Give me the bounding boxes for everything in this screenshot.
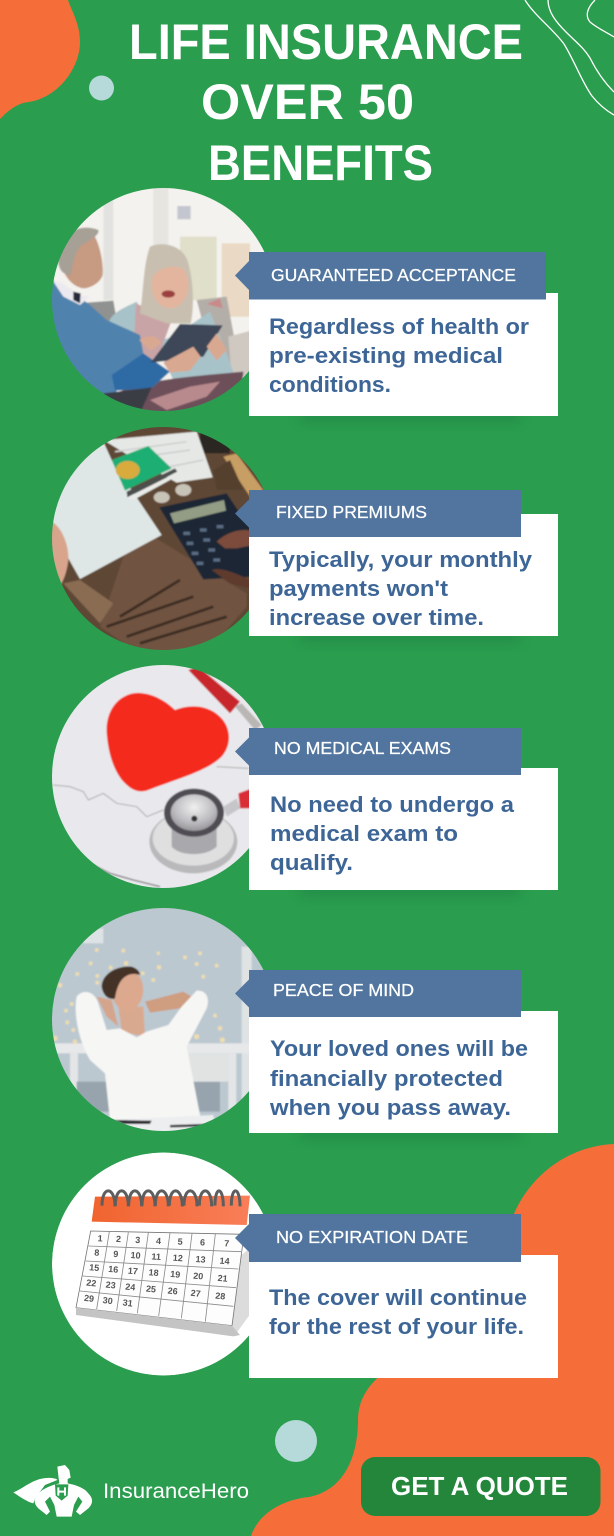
calendar dates: 10 xyxy=(130,1250,141,1261)
calendar dates: 4 xyxy=(156,1236,161,1246)
title: LIFE INSURANCE xyxy=(129,14,523,70)
calendar dates: 22 xyxy=(86,1278,97,1289)
calendar dates: 14 xyxy=(219,1256,230,1266)
title: OVER 50 xyxy=(201,74,414,130)
card: peace of mind: Your loved ones will be xyxy=(270,1036,528,1061)
card: guaranteed acceptance xyxy=(235,252,558,422)
card: no expiration date: The cover will continue xyxy=(269,1285,527,1310)
calendar dates: 24 xyxy=(125,1282,136,1293)
photo: relaxed woman at desk xyxy=(52,908,264,1131)
calendar dates: 19 xyxy=(170,1269,181,1280)
card: fixed premiums: Typically, your monthly xyxy=(269,547,533,572)
calendar dates: 8 xyxy=(94,1248,100,1258)
calendar dates: 5 xyxy=(177,1237,183,1247)
decorative orange blob top left xyxy=(0,0,80,119)
card: peace of mind: financially protected xyxy=(270,1066,503,1091)
calendar dates: 15 xyxy=(89,1262,100,1273)
card: fixed premiums: FIXED PREMIUMS xyxy=(276,502,427,522)
logo: InsuranceHero xyxy=(13,1465,249,1517)
button: get a quote xyxy=(361,1457,600,1516)
calendar dates: 25 xyxy=(145,1284,156,1295)
light blue dot bottom xyxy=(275,1420,317,1462)
icon: caped hero xyxy=(13,1465,92,1517)
card: fixed premiums xyxy=(235,490,558,642)
calendar dates: 26 xyxy=(167,1286,178,1297)
card: fixed premiums: payments won't xyxy=(269,576,449,601)
calendar base xyxy=(76,1308,240,1336)
calendar dates: 16 xyxy=(108,1264,119,1275)
card: guaranteed acceptance: pre-existing medical xyxy=(269,343,503,368)
card: fixed premiums: increase over time. xyxy=(269,605,484,630)
calendar dates: 3 xyxy=(135,1235,141,1245)
photo: couple with tablet xyxy=(52,188,264,411)
card: peace of mind: when you pass away. xyxy=(269,1095,511,1120)
card: no medical exams: qualify. xyxy=(270,850,353,875)
calendar dates: 13 xyxy=(195,1254,206,1265)
card: guaranteed acceptance: GUARANTEED ACCEPTANCE xyxy=(271,265,516,285)
decorative contour lines top right xyxy=(525,0,614,115)
calendar dates: 27 xyxy=(190,1288,201,1299)
calendar dates: 7 xyxy=(224,1238,230,1248)
calendar header xyxy=(92,1196,250,1225)
card: no expiration date: for the rest of your life. xyxy=(269,1314,524,1339)
title xyxy=(129,14,523,191)
calendar dates: 17 xyxy=(128,1266,138,1276)
calendar dates: 20 xyxy=(193,1271,204,1281)
card: no medical exams: NO MEDICAL EXAMS xyxy=(274,738,451,758)
button: get a quote: GET A QUOTE xyxy=(391,1471,568,1501)
light blue dot top xyxy=(89,76,114,100)
title: BENEFITS xyxy=(208,135,433,191)
logo: InsuranceHero: InsuranceHero xyxy=(103,1480,249,1503)
photo: red heart and stethoscope xyxy=(52,665,264,888)
card: peace of mind xyxy=(235,970,558,1139)
calendar grid xyxy=(80,1232,241,1322)
card: no medical exams: medical exam to xyxy=(270,821,458,846)
card: no medical exams xyxy=(235,728,558,896)
calendar dates: 31 xyxy=(122,1297,133,1309)
card: guaranteed acceptance: conditions. xyxy=(269,372,391,397)
photo: calculator on wooden desk xyxy=(52,427,264,650)
calendar dates: 30 xyxy=(102,1295,113,1306)
calendar stand xyxy=(232,1250,249,1332)
calendar dates: 2 xyxy=(116,1234,121,1244)
calendar sheet xyxy=(76,1231,244,1326)
calendar dates: 11 xyxy=(151,1251,161,1262)
calendar dates: 9 xyxy=(113,1249,119,1259)
calendar dates: 21 xyxy=(217,1273,228,1284)
card: peace of mind: PEACE OF MIND xyxy=(273,980,414,1000)
card: no expiration date: NO EXPIRATION DATE xyxy=(276,1227,468,1247)
calendar dates xyxy=(83,1233,230,1309)
calendar dates: 18 xyxy=(148,1267,159,1278)
calendar dates: 29 xyxy=(83,1293,95,1304)
calendar dates: 23 xyxy=(105,1280,116,1291)
card: guaranteed acceptance: Regardless of health or xyxy=(269,314,529,339)
card: no medical exams: No need to undergo a xyxy=(270,792,514,817)
calendar dates: 28 xyxy=(215,1291,226,1302)
calendar dates: 1 xyxy=(97,1233,103,1243)
calendar rings xyxy=(102,1191,240,1206)
photo: desk calendar xyxy=(52,1152,275,1376)
card: no expiration date xyxy=(235,1214,558,1378)
calendar dates: 12 xyxy=(173,1253,183,1263)
calendar dates: 6 xyxy=(200,1237,205,1247)
decorative orange blob bottom right xyxy=(251,1144,614,1536)
